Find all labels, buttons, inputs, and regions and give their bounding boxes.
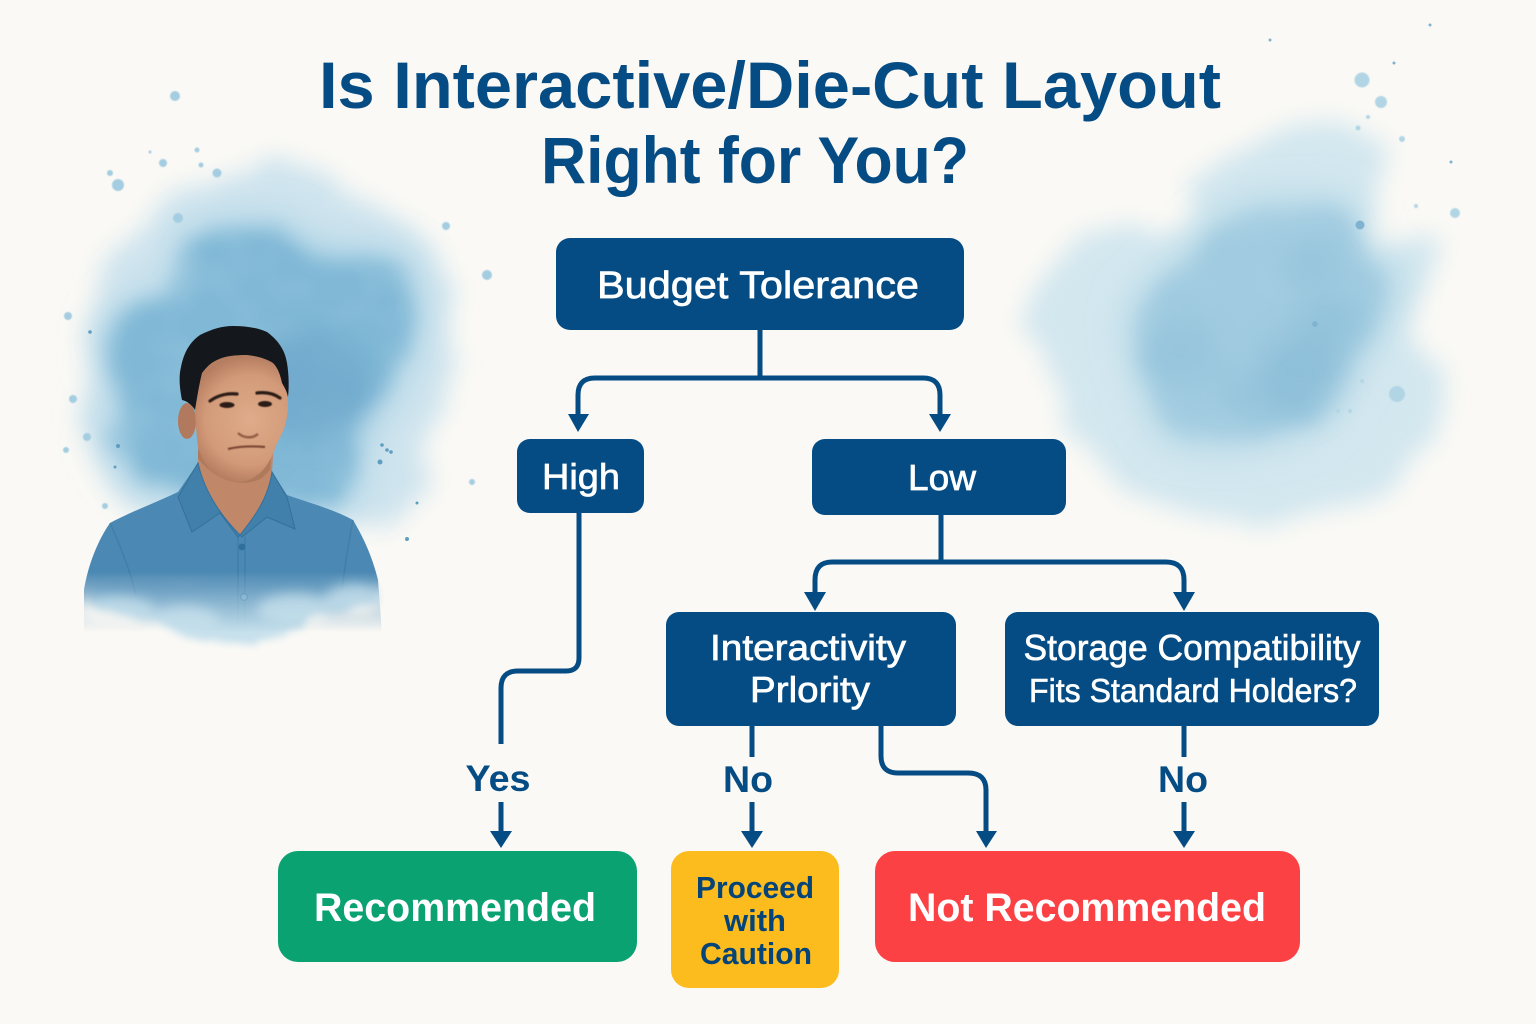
portrait: man in blue shirt: [84, 326, 384, 660]
outcome: Proceed with Caution: [671, 851, 839, 988]
connectors: [501, 330, 1184, 832]
box: Interactivity Priority: Prlority: [750, 669, 870, 710]
box: High: [517, 439, 644, 513]
outcome: Recommended: Recommended: [314, 886, 596, 930]
Storage No: [1182, 726, 1186, 757]
face: [195, 354, 288, 482]
watercolor wash: right: [1023, 24, 1460, 521]
outcome: Not Recommended: Not Recommended: [908, 886, 1266, 930]
Budget Tolerance branches: [578, 330, 1184, 594]
box: Storage Compatibility: Storage Compatibility: [1024, 627, 1360, 668]
label: Yes: Yes: [466, 758, 530, 799]
Interactivity to Not Recommended: [881, 726, 986, 832]
label: No (Interactivity): No: [723, 759, 773, 800]
facial features: [210, 393, 280, 449]
Interactivity No: [750, 726, 754, 757]
outcome: Not Recommended: [875, 851, 1300, 962]
title: Right for You?: [541, 123, 969, 197]
box: Interactivity Priority: Interactivity: [710, 627, 906, 668]
title: Is Interactive/Die-Cut Layout: [319, 48, 1221, 122]
box: Budget Tolerance: [556, 238, 964, 330]
outcome: Proceed with Caution: with: [723, 903, 786, 938]
box: Low: Low: [908, 457, 977, 498]
speckles: [63, 91, 492, 509]
outcome: Proceed with Caution: Caution: [700, 936, 812, 971]
outcome: Proceed with Caution: Proceed: [696, 870, 814, 905]
outcome: Recommended: [278, 851, 637, 962]
watercolor wash: left: [63, 91, 492, 541]
box: Low: [812, 439, 1066, 515]
label: No (Storage): No: [1158, 759, 1208, 800]
shirt: [84, 469, 382, 629]
speckles: [1336, 72, 1460, 413]
arrowheads: [490, 414, 1195, 848]
box: Interactivity Priority: [666, 612, 956, 726]
Yes arrow shaft: [498, 802, 504, 832]
title: [319, 48, 1221, 197]
hair: [180, 326, 289, 410]
box: Storage Compatibility: Fits Standard Holders?: [1029, 672, 1357, 709]
High to Yes: [501, 513, 579, 744]
ear: [178, 403, 196, 439]
neck: [198, 440, 274, 535]
box: Storage Compatibility: [1005, 612, 1379, 726]
box: Budget Tolerance: Budget Tolerance: [597, 265, 919, 307]
pale fade beneath shirt: [90, 572, 378, 644]
box: High: High: [542, 456, 620, 497]
collar: [178, 463, 240, 537]
